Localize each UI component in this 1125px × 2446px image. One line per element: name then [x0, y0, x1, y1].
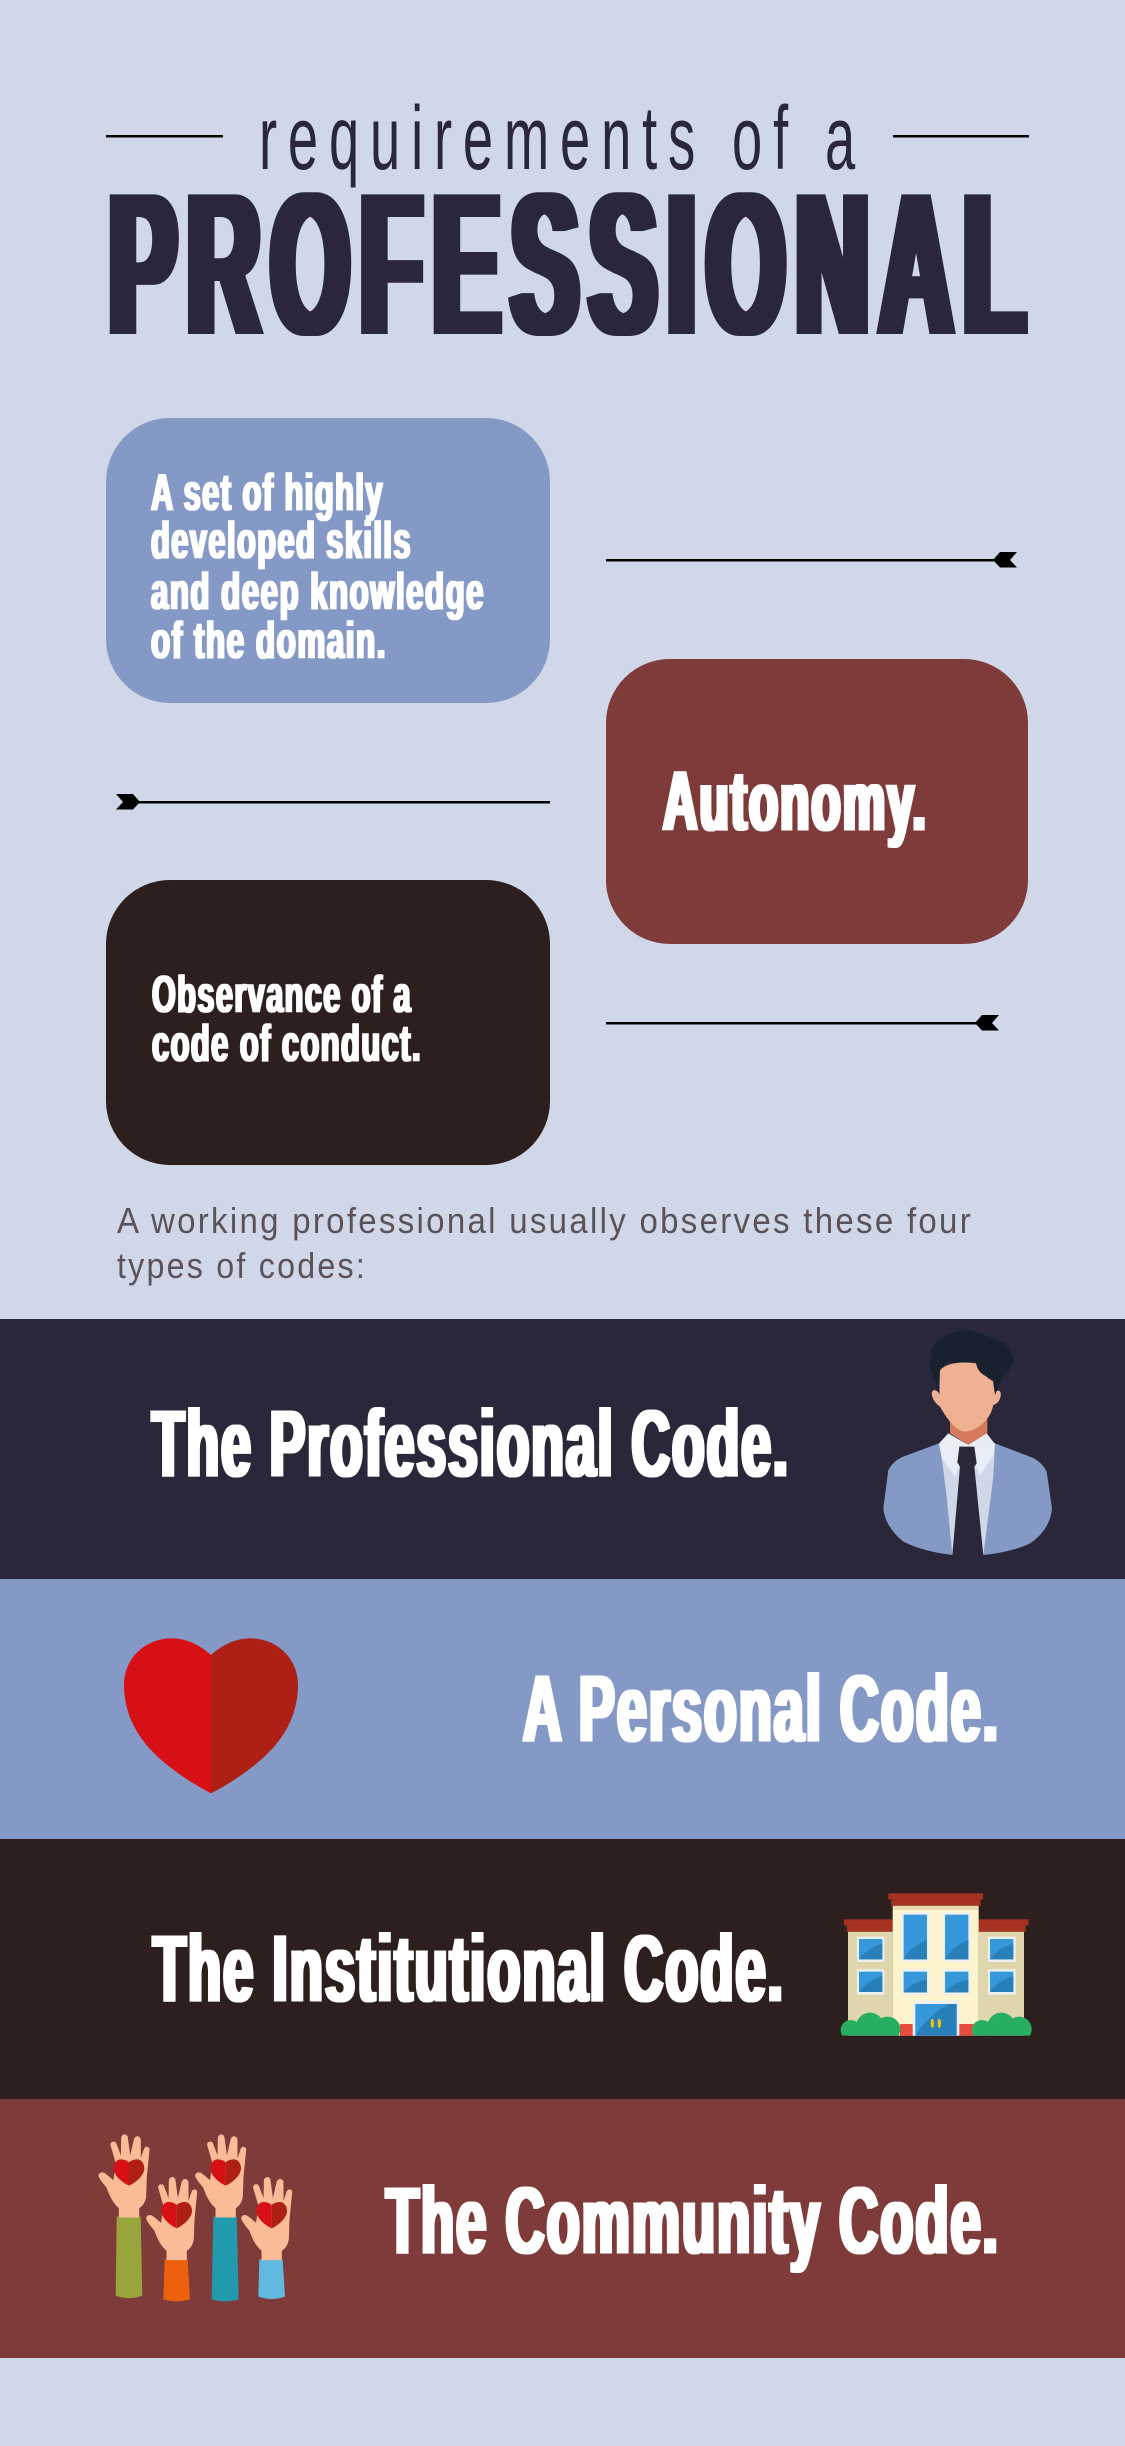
- arrow 2: [116, 794, 550, 810]
- band background: [0, 2099, 1125, 2358]
- icon: building: [841, 1893, 1032, 2042]
- skills text: [151, 464, 485, 670]
- panel: skills: [106, 418, 550, 703]
- skills text: developed skills: [151, 512, 412, 570]
- conduct text: [152, 966, 422, 1073]
- icon: businessman: [883, 1330, 1052, 1555]
- skills text: and deep knowledge: [151, 563, 485, 621]
- icon: raised hands with hearts: [99, 2135, 291, 2301]
- panel: code of conduct: [106, 880, 550, 1165]
- panel: professional code band: [0, 1319, 1125, 1579]
- panel: autonomy: [606, 659, 1028, 944]
- band background: [0, 1319, 1125, 1579]
- panel: institutional code band: [0, 1839, 1125, 2099]
- title rule left: [106, 135, 223, 138]
- conduct text: Observance of a: [152, 966, 412, 1024]
- band background: [0, 1579, 1125, 1839]
- skills text: of the domain.: [151, 612, 387, 670]
- arrow 1: [606, 552, 1017, 568]
- band background: [0, 1839, 1125, 2099]
- intro paragraph: A working professional usually observes these four: [117, 1200, 973, 1241]
- skills text: A set of highly: [151, 464, 384, 522]
- title: [106, 89, 1036, 378]
- autonomy text: Autonomy.: [663, 754, 928, 848]
- skills box: [106, 418, 550, 703]
- icon: heart: [124, 1638, 298, 1793]
- panel: community code band: [0, 2099, 1125, 2358]
- intro paragraph: types of codes:: [117, 1245, 367, 1286]
- arrow 3: [606, 1015, 999, 1030]
- title rule right: [893, 135, 1029, 138]
- autonomy box: [606, 659, 1028, 944]
- panel: personal code band: [0, 1579, 1125, 1839]
- conduct text: code of conduct.: [152, 1015, 422, 1073]
- conduct box: [106, 880, 550, 1165]
- intro paragraph: [117, 1200, 973, 1286]
